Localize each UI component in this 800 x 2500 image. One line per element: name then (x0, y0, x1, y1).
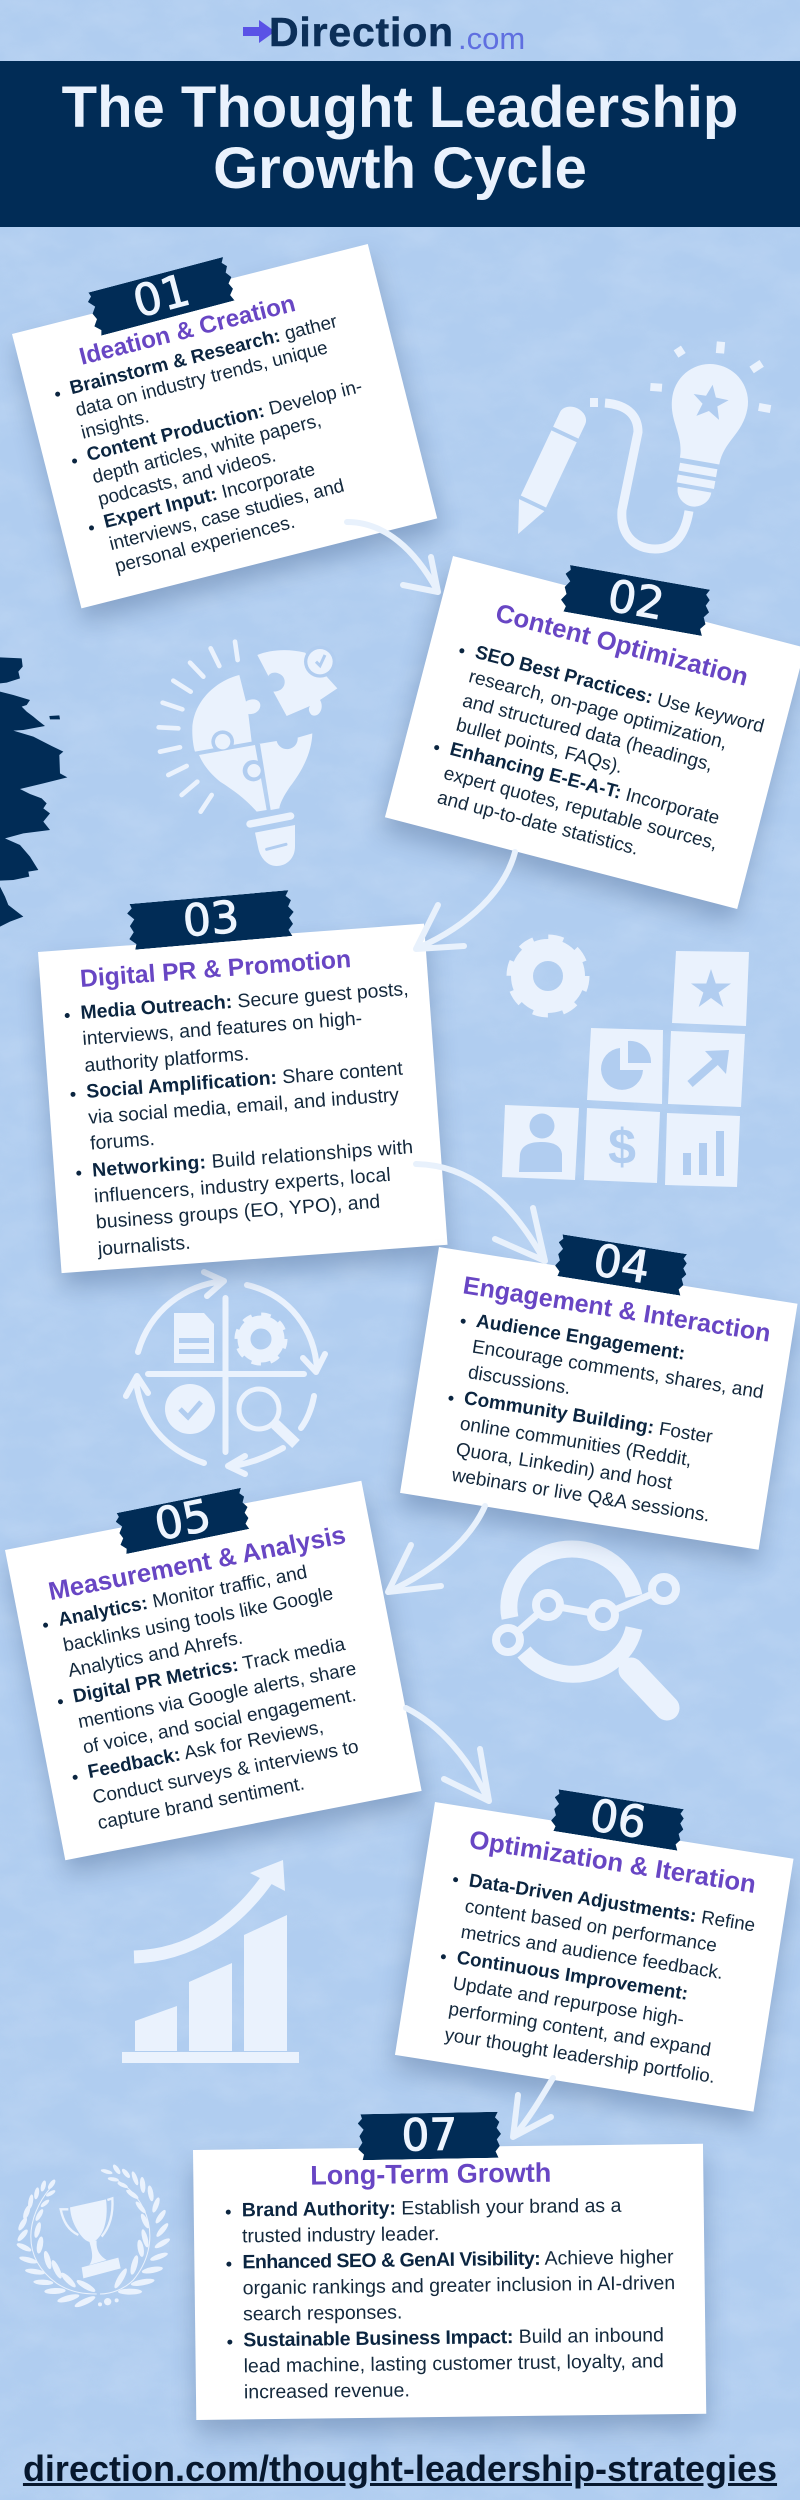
body text: your thought leadership portfolio. (443, 2024, 717, 2087)
body text: Enhancing E-E-A-T: Incorporate (448, 739, 722, 829)
icon: magnifier with trend line (496, 1549, 676, 1708)
body text: forums. (89, 1128, 156, 1155)
body text: increased revenue. (244, 2379, 410, 2403)
body text: Update and repurpose high- (451, 1972, 686, 2029)
body text: depth articles, white papers, (90, 410, 323, 488)
body text: Quora, Linkedin) and host (454, 1439, 674, 1494)
body text: Brainstorm & Research: gather (68, 311, 339, 399)
body text: Analytics and Ahrefs. (66, 1627, 245, 1682)
step number 03: 03 (181, 892, 241, 947)
body text: online communities (Reddit, (458, 1414, 693, 1471)
body text: bullet points, FAQs). (454, 715, 625, 778)
step number 07 (358, 2112, 501, 2160)
trophy (61, 2198, 121, 2278)
panel: step 6 optimization and iteration (395, 1802, 794, 2112)
title banner (0, 61, 800, 227)
body text: Media Outreach: Secure guest posts, (80, 978, 409, 1024)
body text: of voice, and social engagement. (81, 1684, 358, 1758)
icon: gear (511, 939, 585, 1013)
dollar tile: $ (608, 1119, 636, 1175)
body text: Networking: Build relationships with (91, 1136, 414, 1181)
body text: Audience Engagement: (475, 1311, 687, 1365)
body text: Enhanced SEO & GenAI Visibility: Achieve higher (242, 2246, 674, 2273)
body text (43, 1562, 360, 1834)
panel: step 1 ideation and creation (12, 244, 437, 608)
body text: Sustainable Business Impact: Build an inbound (243, 2324, 664, 2351)
body text: Brand Authority: Establish your brand as a (242, 2195, 622, 2221)
icon: growth bar chart (122, 1860, 299, 2063)
body text: interviews, and features on high- (82, 1008, 363, 1050)
arrow: step 4 to step 5 (388, 1506, 485, 1592)
panel: step 5 measurement and analysis (5, 1481, 422, 1860)
body text: lead machine, lasting customer trust, loyalty, and (244, 2350, 664, 2377)
logo: .com (458, 21, 525, 56)
pie tile (587, 1028, 663, 1104)
star tile (672, 951, 749, 1026)
body text: Conduct surveys & interviews to (91, 1737, 360, 1809)
step number 04: 04 (590, 1235, 653, 1294)
heading: Long-Term Growth (310, 2158, 551, 2191)
body text: authority platforms. (84, 1042, 250, 1076)
title (62, 75, 738, 200)
footer url: direction.com/thought-leadership-strategies (23, 2448, 777, 2489)
step number 04 (554, 1234, 689, 1296)
body text: metrics and audience feedback. (459, 1921, 725, 1983)
step number 07: 07 (401, 2110, 458, 2161)
body text (64, 978, 414, 1260)
body text: business groups (EO, YPO), and (95, 1191, 381, 1234)
step number 01 (86, 256, 237, 336)
panel: step 3 digital pr and promotion (38, 924, 448, 1273)
body text: Continuous Improvement: (455, 1946, 690, 2004)
body text: and up-to-date statistics. (435, 787, 641, 860)
body text: content based on performance (464, 1895, 718, 1956)
body text: podcasts, and videos. (96, 445, 278, 511)
body text: journalists. (97, 1231, 191, 1260)
laurel wreath (16, 2163, 171, 2309)
body text: discussions. (467, 1362, 572, 1399)
body text: trusted industry leader. (242, 2223, 439, 2247)
step number 05 (114, 1487, 252, 1555)
body text (440, 1869, 757, 2087)
panel: step 2 content optimization (385, 556, 800, 909)
body text: Social Amplification: Share content (86, 1058, 404, 1103)
arrow: step 3 to step 4 (416, 1164, 545, 1261)
body text: research, on-page optimization, (467, 666, 729, 754)
body text: expert quotes, reputable sources, (441, 763, 720, 854)
arrow: step 2 to step 3 (416, 852, 515, 949)
body text: performing content, and expand (447, 1998, 712, 2060)
icon: puzzle light bulb (159, 642, 337, 866)
step number 03 (126, 890, 296, 950)
person tile (502, 1105, 579, 1180)
body text (226, 2195, 675, 2403)
arrow tile (668, 1031, 745, 1107)
arrow: step 6 to step 7 (513, 2078, 553, 2137)
heading: Optimization & Iteration (467, 1826, 758, 1899)
body text: data on industry trends, unique (73, 337, 330, 421)
step number 06 (550, 1789, 686, 1851)
arrow: step 5 to step 6 (406, 1708, 489, 1801)
logo (243, 9, 525, 56)
body text: Data-Driven Adjustments: Refine (468, 1869, 757, 1935)
heading: Digital PR & Promotion (79, 946, 352, 993)
arrow: step 1 to step 2 (347, 522, 438, 592)
body text: mentions via Google alerts, share (76, 1658, 358, 1733)
body text: personal experiences. (113, 512, 297, 577)
body text: Community Building: Foster (462, 1388, 714, 1448)
body text: Content Production: Develop in- (85, 376, 364, 466)
body text: interviews, case studies, and (107, 476, 346, 555)
body text: capture brand sentiment. (96, 1774, 306, 1834)
heading: Content Optimization (493, 599, 751, 692)
title: Growth Cycle (213, 136, 587, 200)
body text (434, 642, 766, 860)
step number 02: 02 (604, 570, 668, 630)
body text: backlinks using tools like Google (61, 1583, 335, 1656)
body text: Expert Input: Incorporate (102, 459, 317, 533)
body text: organic rankings and greater inclusion in AI-driven (243, 2272, 675, 2299)
icon: pencil and light bulb (505, 341, 771, 549)
body text (55, 311, 364, 577)
body text: Encourage comments, shares, and (471, 1337, 765, 1403)
body text (448, 1311, 765, 1527)
body text: insights. (79, 406, 151, 444)
panel: step 4 engagement and interaction (400, 1247, 798, 1550)
body text: Digital PR Metrics: Track media (71, 1634, 347, 1707)
body text: webinars or live Q&A sessions. (450, 1465, 711, 1527)
bars tile (665, 1113, 740, 1187)
body text: and structured data (headings, (460, 690, 715, 776)
logo: Direction (269, 9, 454, 55)
brush stroke (0, 657, 67, 927)
body text: via social media, email, and industry (87, 1084, 400, 1129)
heading: Measurement & Analysis (46, 1521, 348, 1606)
step number 02 (559, 564, 713, 636)
dollar tile (584, 1108, 660, 1183)
heading: Engagement & Interaction (461, 1271, 773, 1348)
heading: Ideation & Creation (77, 290, 298, 371)
body text: influencers, industry experts, local (93, 1164, 392, 1208)
icon: process cycle (126, 1272, 325, 1474)
icon: trophy wreath (16, 2163, 171, 2309)
step number 01: 01 (128, 264, 195, 328)
body text: search responses. (243, 2301, 402, 2325)
body text: Analytics: Monitor traffic, and (56, 1562, 309, 1631)
body text: Feedback: Ask for Reviews, (86, 1717, 325, 1783)
step number 06: 06 (586, 1790, 650, 1849)
icon: tile grid (502, 951, 749, 1187)
step number 05: 05 (150, 1490, 215, 1551)
title: The Thought Leadership (62, 75, 738, 140)
body text: SEO Best Practices: Use keyword (473, 642, 766, 738)
panel: step 7 long-term growth (193, 2144, 706, 2420)
